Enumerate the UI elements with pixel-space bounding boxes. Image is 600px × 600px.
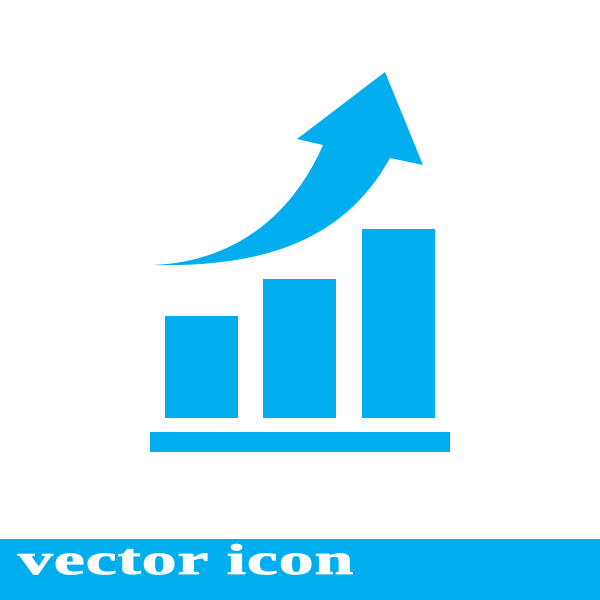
bar 3 (362, 229, 435, 418)
banner text: vector icon (18, 537, 354, 584)
arrow (153, 72, 423, 265)
base line (150, 432, 450, 452)
banner (0, 539, 600, 600)
bar 2 (263, 279, 336, 418)
bar 1 (165, 316, 238, 418)
